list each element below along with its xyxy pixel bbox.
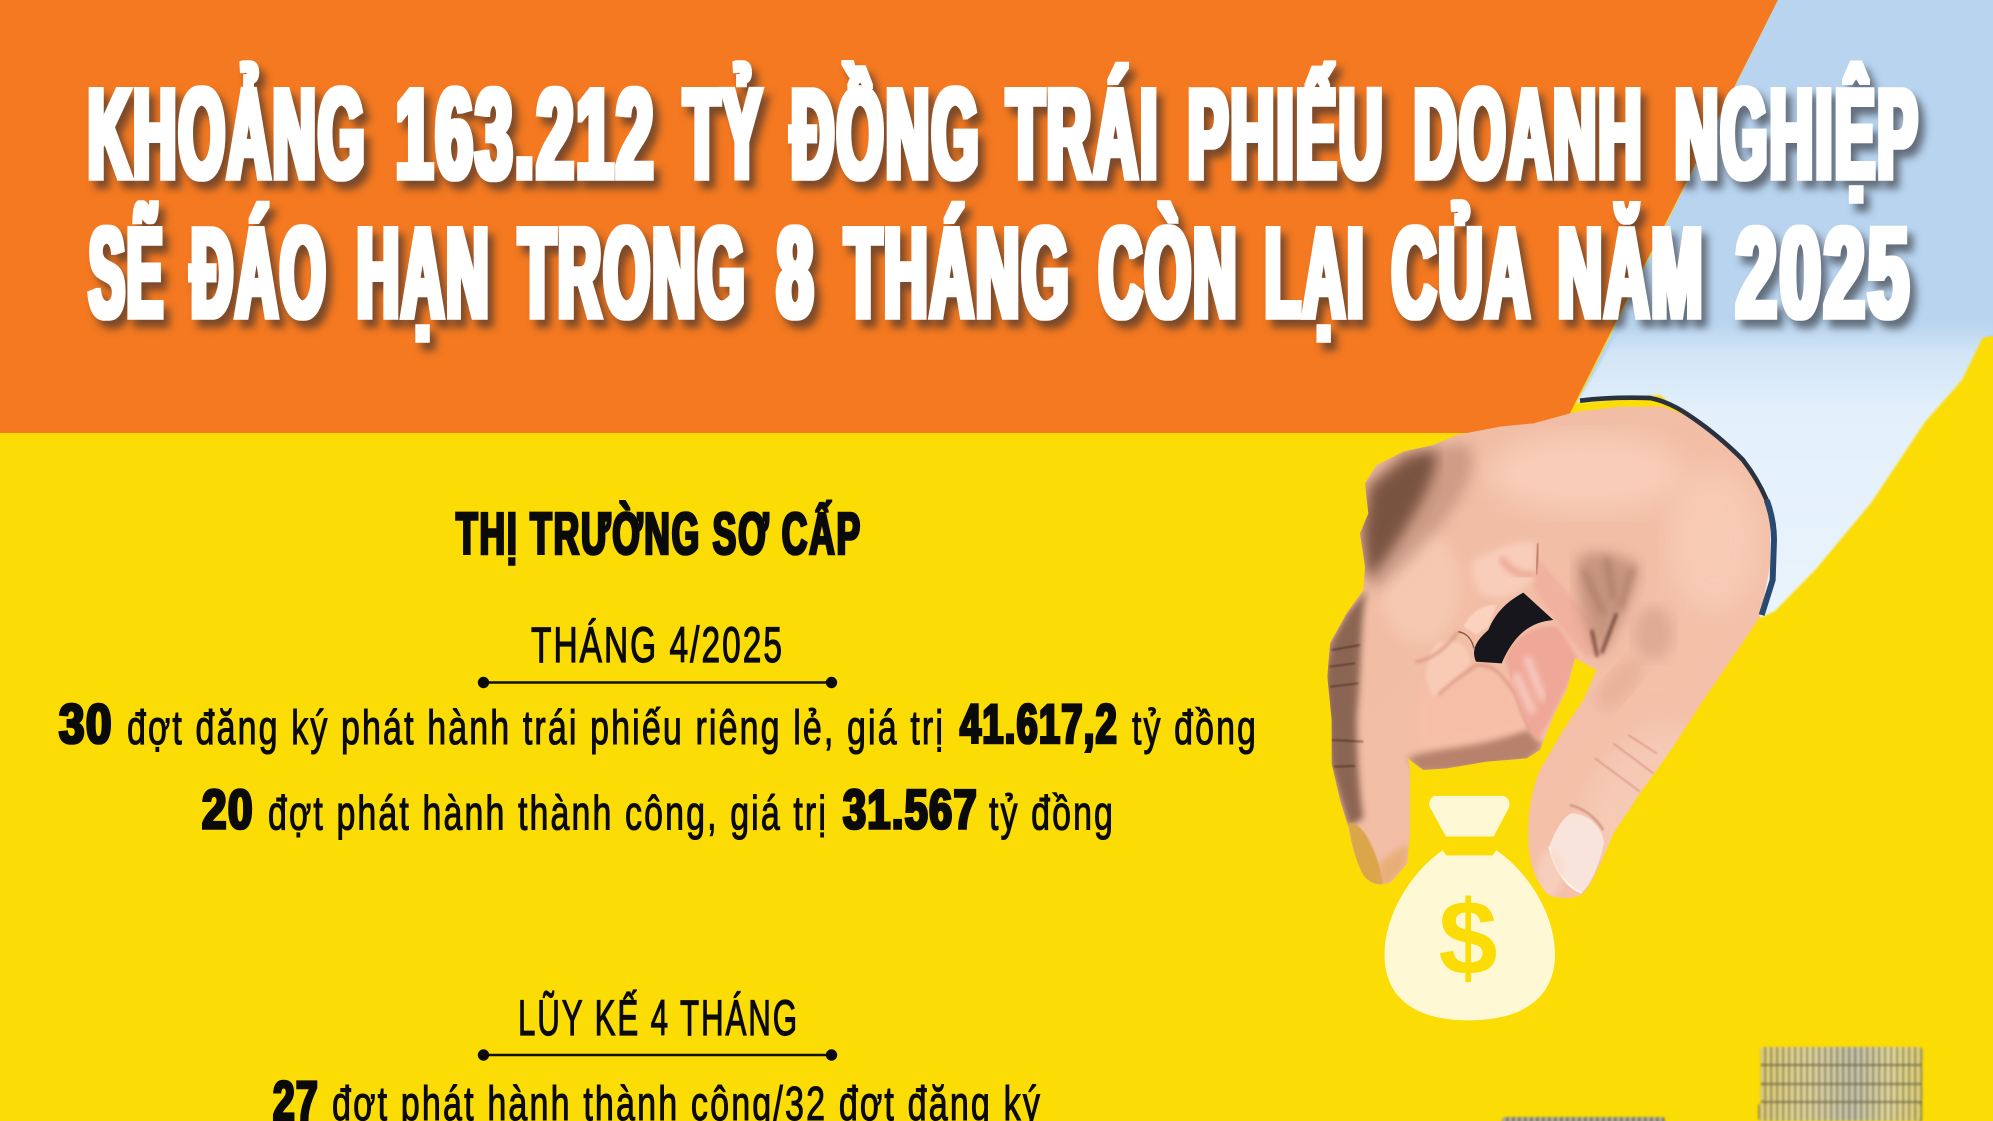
section: cumulative 4 months: [273, 990, 1042, 1121]
stat: successful issues: đợt phát hành thành công, giá trị: [268, 788, 828, 840]
stat: cumulative issues: [273, 1069, 1042, 1121]
title: [88, 62, 1920, 345]
illustration: hand dropping money bag: [1325, 320, 1993, 1020]
title: HẠN: [357, 202, 491, 345]
title: CỦA: [1392, 202, 1532, 345]
title: 163.212: [396, 63, 656, 206]
title: ĐÁO: [191, 202, 328, 345]
coin stack: right: [1758, 1047, 1923, 1121]
title: NĂM: [1558, 202, 1705, 345]
curled finger underside: [1407, 728, 1543, 772]
stat: registered issues: 30: [59, 692, 113, 755]
shirt sleeve: [1577, 320, 1993, 618]
hand and fingers: [1325, 398, 1774, 898]
title: KHOẢNG: [88, 62, 367, 206]
title: LẠI: [1265, 202, 1366, 345]
title: THÁNG: [845, 202, 1071, 345]
stat: successful issues: 31.567: [843, 778, 978, 840]
subheading: month: THÁNG 4/2025: [531, 617, 784, 673]
knuckle shadow: [1360, 443, 1473, 593]
header corner: light blue: [1577, 0, 1993, 402]
title: ĐỒNG: [791, 63, 981, 206]
title: TRÁI: [1007, 63, 1160, 206]
heading: primary market: THỊ TRƯỜNG SƠ CẤP: [456, 501, 862, 567]
divider with end dots: [478, 1049, 837, 1061]
thumb nail: [1549, 813, 1604, 893]
title: CÒN: [1099, 202, 1239, 345]
icon: dollar sign: $: [1439, 879, 1497, 997]
index nail: [1348, 823, 1383, 885]
dark gap between fingers: [1474, 593, 1553, 663]
stat: registered issues: tỷ đồng: [1132, 702, 1258, 755]
coin stacks: [1502, 1047, 1923, 1121]
icon: money bag: [1385, 796, 1555, 1020]
shirt cuff edge: [1580, 398, 1774, 615]
stat: registered issues: đợt đăng ký phát hành trái phiếu riêng lẻ, giá trị: [127, 702, 945, 755]
title: PHIẾU: [1188, 63, 1385, 206]
section: April 2025: [59, 617, 1258, 840]
divider with end dots: [478, 677, 837, 688]
title: 8: [777, 202, 816, 345]
fold above gap: [1472, 542, 1537, 598]
pink thumb pad: [1505, 626, 1577, 740]
subheading: cumulative: LŨY KẾ 4 THÁNG: [518, 990, 799, 1046]
title: TỶ: [684, 63, 764, 206]
title: DOANH: [1414, 63, 1644, 206]
title: TRONG: [519, 202, 747, 345]
coin stack: left: [1502, 1117, 1665, 1121]
stat: registered issues: 41.617,2: [960, 692, 1118, 755]
dark side of index finger: [1325, 590, 1367, 827]
palm creases: [1534, 563, 1594, 656]
header panel: orange: [0, 0, 1778, 433]
thumb creases: [1595, 735, 1657, 792]
title: SẼ: [89, 202, 165, 345]
stat: successful issues: 20: [202, 778, 254, 840]
stat: successful issues: tỷ đồng: [989, 788, 1115, 840]
